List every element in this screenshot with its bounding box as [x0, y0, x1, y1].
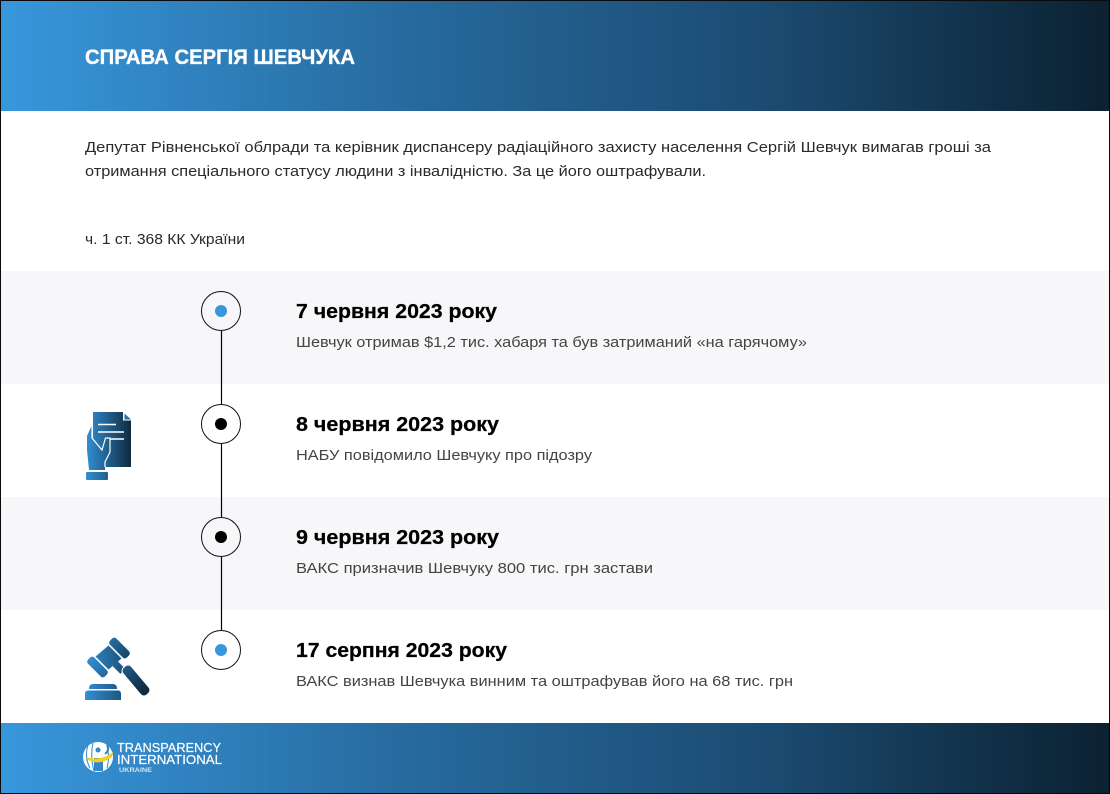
timeline event 1: Шевчук отримав $1,2 тис. хабаря та був затриманий «на гарячому»	[296, 334, 807, 351]
timeline event 2: 8 червня 2023 року	[296, 413, 500, 436]
timeline event 2: НАБУ повідомило Шевчуку про підозру	[296, 447, 593, 464]
timeline event 3: 9 червня 2023 року	[296, 526, 500, 549]
timeline event 1	[202, 292, 807, 351]
timeline event 2	[202, 404, 593, 464]
header band	[0, 0, 1110, 111]
timeline event 3	[202, 518, 653, 577]
legal article reference: ч. 1 ст. 368 КК України	[85, 232, 245, 248]
timeline event 4: 17 серпня 2023 року	[296, 639, 508, 662]
timeline event 3: ВАКС призначив Шевчуку 800 тис. грн застави	[296, 560, 653, 577]
timeline event 1: 7 червня 2023 року	[296, 300, 498, 323]
logo: Transparency International Ukraine: INTERNATIONAL	[117, 752, 222, 767]
logo: Transparency International Ukraine: UKRAINE	[119, 767, 153, 774]
icon: judge gavel	[85, 636, 152, 700]
logo: Transparency International Ukraine	[83, 740, 222, 774]
timeline line	[220, 330, 222, 632]
intro text	[85, 139, 992, 180]
timeline event 4	[202, 630, 793, 690]
timeline event 4: ВАКС визнав Шевчука винним та оштрафував його на 68 тис. грн	[296, 673, 793, 690]
row backgrounds	[1, 271, 1109, 610]
icon: hand holding document	[86, 412, 131, 480]
title: СПРАВА СЕРГІЯ ШЕВЧУКА	[85, 46, 355, 69]
footer band	[0, 723, 1110, 794]
logo: Transparency International Ukraine: TRANSPARENCY	[117, 740, 221, 755]
intro text: отримання спеціального статусу людини з інвалідністю. За це його оштрафували.	[85, 163, 706, 180]
intro text: Депутат Рівненської облради та керівник диспансеру радіаційного захисту населення Сергій Шевчук вимагав гроші за	[85, 139, 992, 156]
